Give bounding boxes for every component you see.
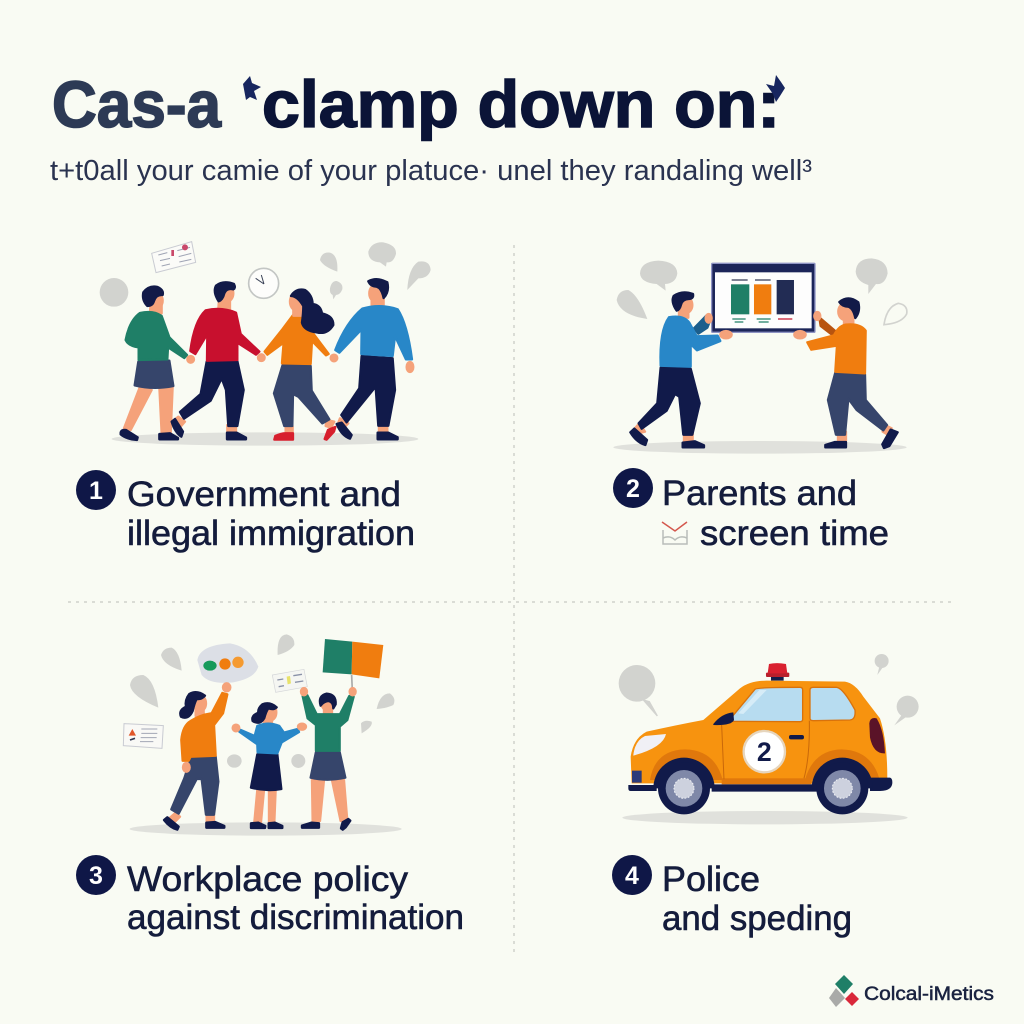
title: Cas-a bbox=[52, 67, 222, 141]
label 3: Workplace policy bbox=[127, 860, 409, 899]
badge 1: 1 bbox=[89, 477, 103, 505]
label 2: screen time bbox=[700, 514, 889, 553]
label 4: and speding bbox=[662, 899, 852, 938]
siren bbox=[766, 663, 789, 681]
person 3: orange bbox=[265, 290, 337, 440]
document card bbox=[123, 724, 163, 748]
windows bbox=[728, 687, 803, 722]
label 1: Government and bbox=[127, 475, 401, 514]
illustration: orange car bbox=[619, 654, 919, 824]
label 4 bbox=[662, 860, 852, 938]
label 3 bbox=[127, 860, 464, 937]
person 1: green bbox=[121, 287, 194, 440]
bumpers bbox=[628, 778, 892, 792]
panel: police and speeding bbox=[612, 654, 919, 938]
illustration: four people holding hands bbox=[100, 242, 431, 446]
label 2 bbox=[662, 474, 889, 553]
panel: workplace policy against discrimination bbox=[76, 634, 464, 937]
badge 2 bbox=[613, 468, 653, 508]
label 2: Parents and bbox=[662, 474, 857, 513]
speech bubble with puzzle shapes bbox=[197, 643, 258, 683]
woman 1: orange bbox=[164, 683, 230, 830]
mirror bbox=[713, 712, 734, 725]
door number badge: 2 bbox=[757, 737, 772, 767]
woman 2: blue bbox=[233, 703, 306, 828]
label 3: against discrimination bbox=[127, 898, 464, 937]
person left: blue bbox=[630, 292, 732, 447]
label 4: Police bbox=[662, 860, 760, 899]
label 1 bbox=[127, 475, 415, 553]
badge 4: 4 bbox=[625, 862, 639, 890]
sign card bbox=[272, 669, 307, 692]
illustration: three people with flag bbox=[123, 634, 402, 836]
woman 3: green bbox=[301, 688, 356, 830]
car body bbox=[631, 681, 887, 783]
label 1: illegal immigration bbox=[127, 514, 415, 553]
flag bbox=[323, 639, 383, 690]
logo: Colcal-iMetics bbox=[864, 984, 994, 1005]
icon: envelope bbox=[662, 522, 687, 544]
badge 3 bbox=[76, 855, 116, 895]
logo bbox=[829, 975, 994, 1007]
illustration: two people holding a screen bbox=[613, 258, 907, 454]
panel: government and illegal immigration bbox=[76, 242, 431, 553]
person right: orange bbox=[794, 298, 898, 448]
person 4: blue bbox=[335, 279, 413, 439]
panel: parents and screen time bbox=[613, 258, 907, 553]
subtitle: t+t0all your camie of your platuce· unel they randaling well³ bbox=[50, 155, 812, 187]
badge 4 bbox=[612, 855, 652, 895]
badge 1 bbox=[76, 470, 116, 510]
door number badge bbox=[744, 731, 785, 772]
front wheel bbox=[653, 758, 715, 814]
badge 3: 3 bbox=[89, 862, 103, 890]
title: clamp down on: bbox=[262, 67, 780, 141]
badge 2: 2 bbox=[626, 475, 640, 503]
title bbox=[52, 67, 785, 141]
screen bbox=[712, 263, 815, 332]
rear wheel bbox=[812, 758, 873, 814]
person 2: red bbox=[172, 282, 265, 439]
